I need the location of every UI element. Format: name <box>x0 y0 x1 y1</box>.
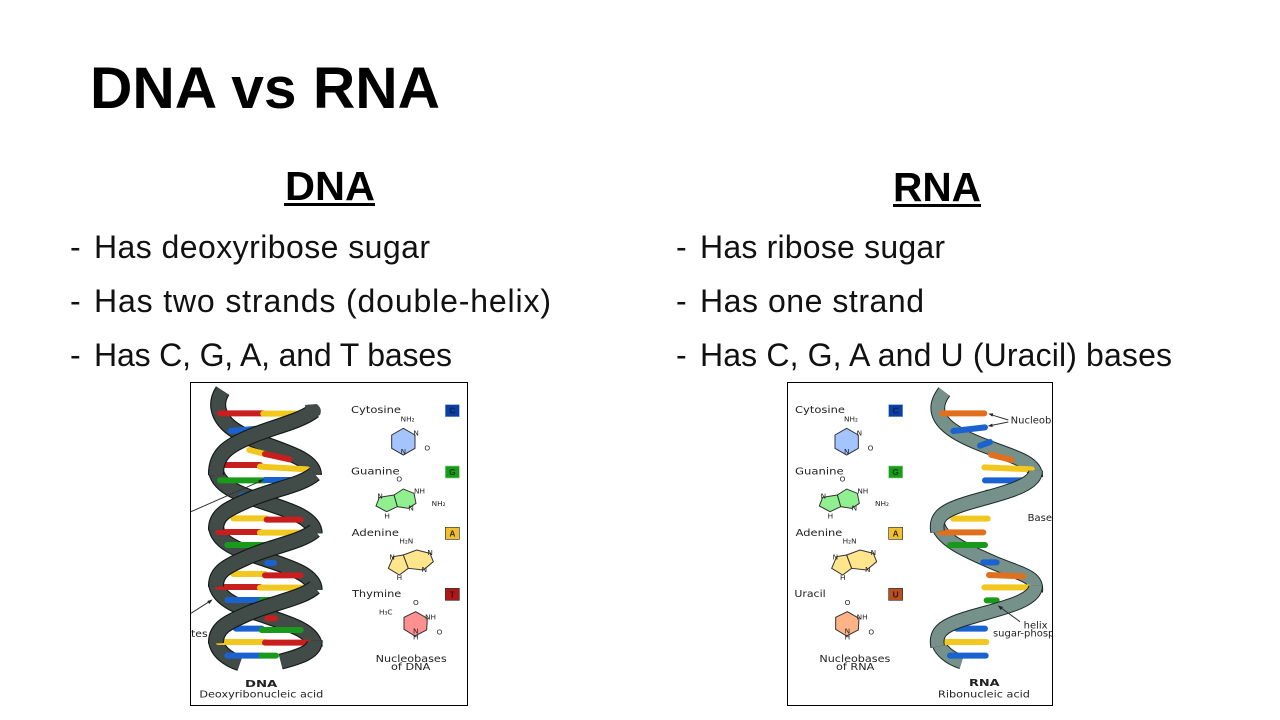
nucleobase: thymine: O <box>413 598 419 607</box>
nucleobase: thymine: T <box>450 589 455 599</box>
caption: nucleobases of RNA: of RNA <box>836 662 875 673</box>
RNA pointer arrows and clipped labels: Bases <box>1028 513 1057 524</box>
nucleobase: guanine: O <box>396 475 402 484</box>
caption: nucleobases of DNA <box>376 654 446 670</box>
nucleobase: cytosine: NH₂ <box>844 414 858 423</box>
RNA bases <box>940 413 1032 656</box>
bullet: two strands: Has two strands (double-helix) <box>94 283 551 319</box>
caption: DNA name <box>200 680 322 700</box>
nucleobase: uracil: O <box>845 598 851 607</box>
nucleobase: adenine: Adenine <box>796 528 842 539</box>
DNA base pairs <box>218 413 308 656</box>
nucleobase: cytosine <box>351 405 459 456</box>
bullet: deoxyribose sugar: - <box>70 229 81 265</box>
DNA pointer arrows and clipped labels <box>191 479 264 637</box>
nucleobase: guanine: O <box>840 475 846 484</box>
caption: DNA name: Deoxyribonucleic acid <box>199 690 323 701</box>
bullet: bases: Has C, G, A, and T bases <box>94 337 452 373</box>
RNA pointer arrows and clipped labels: helix <box>1024 620 1048 631</box>
nucleobase: guanine: N <box>821 492 826 501</box>
nucleobase: cytosine: Cytosine <box>795 405 845 416</box>
DNA front ribbons <box>216 404 321 662</box>
bullet: ribose sugar: - <box>676 229 687 265</box>
RNA pointer arrows and clipped labels <box>988 413 1052 638</box>
nucleobase: thymine: H <box>413 632 419 641</box>
nucleobase: guanine: NH <box>414 487 425 496</box>
nucleobase: cytosine: O <box>868 444 874 453</box>
nucleobase: uracil <box>794 588 903 641</box>
nucleobase: thymine: Thymine <box>351 589 401 600</box>
bullet: bases: - <box>676 337 687 373</box>
nucleobase: cytosine <box>795 405 903 456</box>
nucleobase: cytosine: C <box>449 406 455 416</box>
nucleobase: adenine: Adenine <box>352 528 399 539</box>
nucleobase: guanine: NH₂ <box>875 499 889 508</box>
nucleobase: adenine: N <box>422 565 427 574</box>
nucleobase: guanine: G <box>892 467 899 477</box>
RNA pointer arrows and clipped labels: Nucleobases <box>1011 416 1074 427</box>
nucleobase: guanine: N <box>377 492 383 501</box>
nucleobase: adenine <box>796 527 903 582</box>
RNA back ribbon <box>938 392 1036 662</box>
nucleobase: adenine: N <box>389 553 395 562</box>
nucleobase: adenine: H <box>840 573 846 582</box>
nucleobase: uracil: NH <box>857 612 868 621</box>
nucleobase: guanine <box>351 466 459 520</box>
bullet: one strand: - <box>676 283 687 319</box>
nucleobase: uracil: U <box>893 589 899 599</box>
nucleobase: cytosine: N <box>844 447 849 456</box>
DNA back ribbons <box>216 391 315 663</box>
nucleobase: guanine: H <box>828 511 833 520</box>
bullet: bases: Has C, G, A and U (Uracil) bases <box>700 337 1172 373</box>
bullet: two strands: - <box>70 283 81 319</box>
panel: RNA column text <box>676 164 1172 373</box>
caption: RNA name <box>939 679 1029 698</box>
nucleobase: adenine: N <box>833 553 838 562</box>
caption: nucleobases of RNA: Nucleobases <box>819 654 890 665</box>
nucleobase: cytosine: Cytosine <box>351 405 401 416</box>
RNA pointer arrows and clipped labels: sugar-phosphate <box>993 629 1077 640</box>
nucleobase: uracil: O <box>868 627 874 636</box>
nucleobase: adenine: H₂N <box>843 537 857 546</box>
nucleobase: adenine: N <box>865 565 870 574</box>
nucleobase: guanine: H <box>384 511 390 520</box>
nucleobase: guanine <box>795 466 903 520</box>
nucleobase: guanine: Guanine <box>795 467 844 478</box>
nucleobase: adenine: N <box>871 548 876 557</box>
nucleobase: thymine <box>351 588 459 641</box>
RNA front ribbon <box>937 471 1036 647</box>
heading: RNA: RNA <box>893 164 981 210</box>
nucleobase: cytosine: N <box>401 447 406 456</box>
nucleobase: guanine: N <box>408 504 414 513</box>
panel: DNA diagram <box>185 382 468 706</box>
nucleobase: adenine <box>352 527 459 582</box>
caption: RNA name: Ribonucleic acid <box>938 690 1030 701</box>
nucleobase: cytosine: O <box>424 444 430 453</box>
nucleobase: thymine: N <box>413 626 418 635</box>
nucleobase: guanine: N <box>852 504 857 513</box>
nucleobase: guanine: G <box>449 467 456 477</box>
heading: DNA: DNA <box>285 163 375 209</box>
panel: DNA column text <box>70 163 551 373</box>
nucleobase: thymine: H₃C <box>379 607 393 616</box>
nucleobase: cytosine: N <box>857 429 862 438</box>
nucleobase: adenine: A <box>449 528 455 538</box>
DNA pointer arrows and clipped labels: s <box>185 416 191 427</box>
panel: RNA diagram <box>788 382 1077 706</box>
nucleobase: guanine: NH <box>857 487 868 496</box>
nucleobase: uracil: N <box>845 626 850 635</box>
DNA pointer arrows and clipped labels: tes <box>191 629 208 640</box>
nucleobase: adenine: H <box>397 573 402 582</box>
caption: nucleobases of DNA: Nucleobases <box>376 654 447 665</box>
nucleobase: uracil: Uracil <box>794 589 826 600</box>
nucleobase: adenine: A <box>893 528 899 538</box>
caption: nucleobases of DNA: of DNA <box>391 662 431 673</box>
nucleobase: cytosine: N <box>413 429 419 438</box>
nucleobase: thymine: NH <box>425 612 436 621</box>
bullet: ribose sugar: Has ribose sugar <box>700 229 945 265</box>
caption: RNA name: RNA <box>969 678 1001 689</box>
nucleobase: guanine: NH₂ <box>432 499 446 508</box>
nucleobase: adenine: N <box>427 548 433 557</box>
title: DNA vs RNA <box>90 56 440 121</box>
bullet: bases: - <box>70 337 81 373</box>
nucleobase: cytosine: NH₂ <box>401 414 415 423</box>
nucleobase: thymine: O <box>437 627 443 636</box>
nucleobase: guanine: Guanine <box>351 467 400 478</box>
caption: nucleobases of RNA <box>820 654 890 670</box>
nucleobase: uracil: H <box>845 632 850 641</box>
bullet: deoxyribose sugar: Has deoxyribose sugar <box>94 229 430 265</box>
bullet: one strand: Has one strand <box>700 283 924 319</box>
nucleobase: adenine: H₂N <box>399 537 413 546</box>
caption: DNA name: DNA <box>245 679 278 690</box>
nucleobase: cytosine: C <box>893 406 899 416</box>
